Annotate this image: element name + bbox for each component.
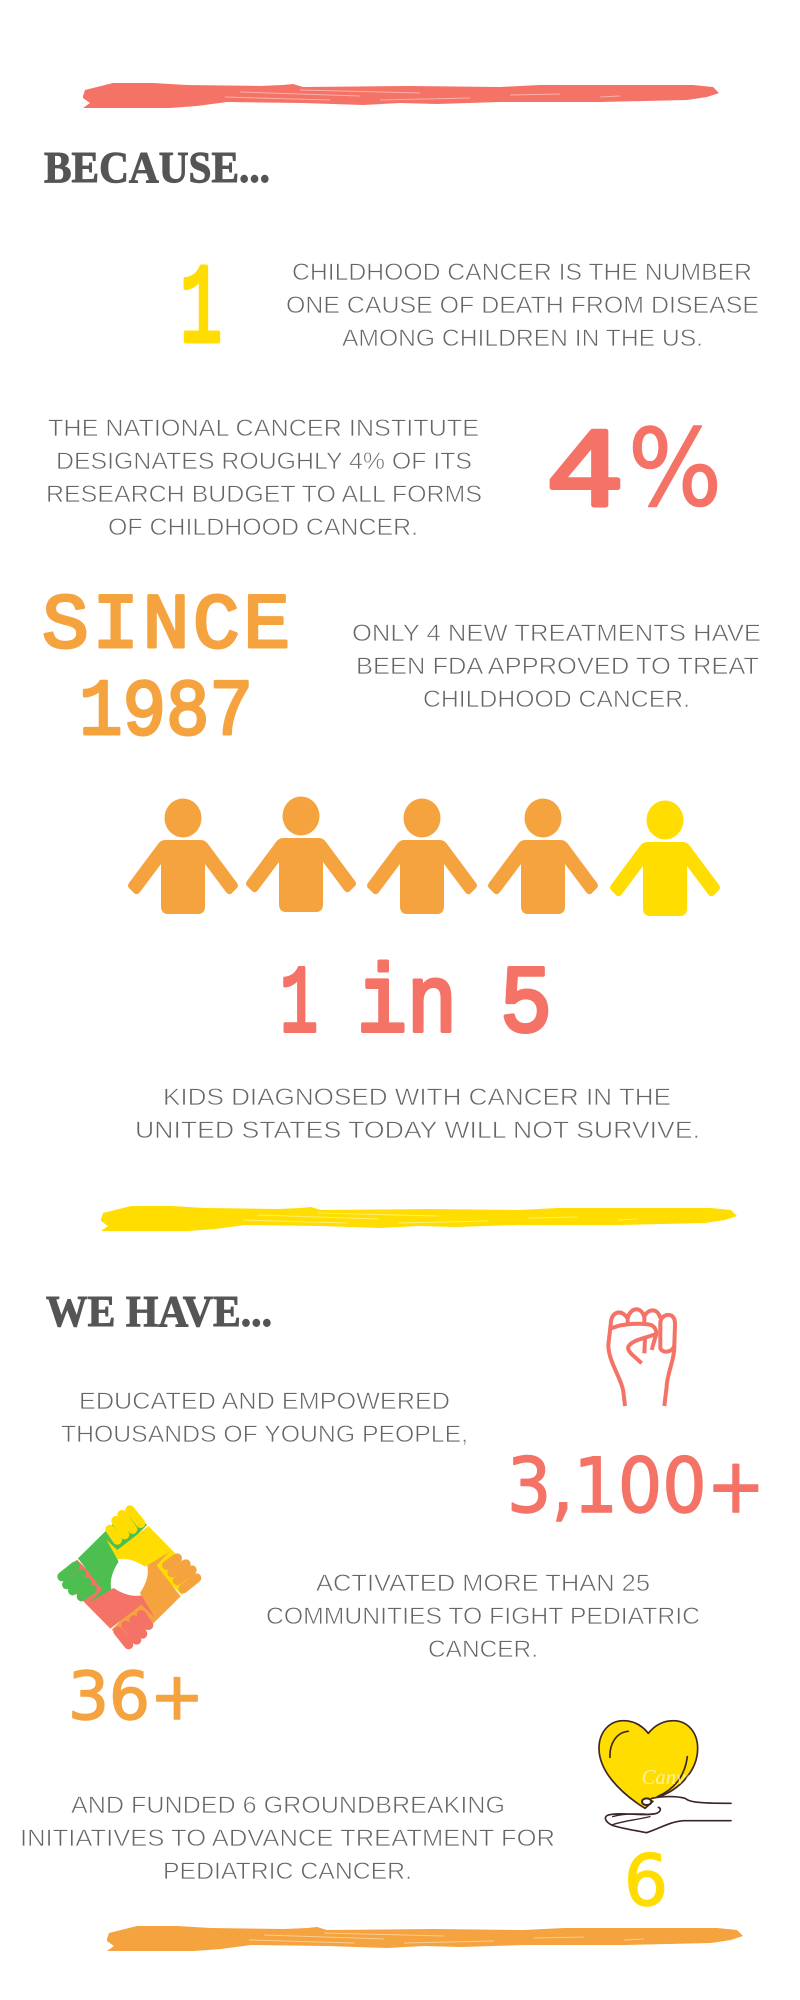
stat: four percent: %	[628, 407, 722, 530]
stat: since 1987	[42, 583, 290, 759]
text block: educated: EDUCATED AND EMPOWERED	[79, 1388, 450, 1415]
icon: four joined hands	[59, 1507, 200, 1648]
stat: 6: 6	[624, 1840, 668, 1922]
text block: will not survive: UNITED STATES TODAY WILL NOT SURVIVE.	[135, 1117, 700, 1144]
text block: will not survive	[135, 1084, 700, 1144]
stat: 1 in 5: 5	[500, 951, 552, 1060]
stat: since 1987: 1987	[79, 668, 253, 759]
icon: child 5 highlighted	[610, 800, 720, 916]
text block: leading cause: CHILDHOOD CANCER IS THE NUMBER	[292, 259, 752, 286]
text block: research budget: DESIGNATES ROUGHLY 4% OF ITS	[56, 448, 472, 475]
brush stroke: yellow	[101, 1206, 737, 1231]
text block: leading cause: AMONG CHILDREN IN THE US.	[342, 325, 703, 352]
text block: research budget: THE NATIONAL CANCER INSTITUTE	[48, 415, 479, 442]
text block: funded initiatives: AND FUNDED 6 GROUNDBREAKING	[71, 1792, 505, 1819]
text block: research budget: OF CHILDHOOD CANCER.	[108, 514, 418, 541]
text block: communities	[266, 1570, 700, 1663]
stat: 3,100+: 3,100+	[507, 1441, 765, 1530]
heading: because: BECAUSE...	[44, 143, 270, 192]
brush stroke: orange	[107, 1926, 743, 1951]
icon row: five children	[128, 796, 720, 916]
icon: heart in hand	[599, 1721, 731, 1833]
text block: research budget: RESEARCH BUDGET TO ALL FORMS	[46, 481, 482, 508]
text block: communities: ACTIVATED MORE THAN 25	[316, 1570, 650, 1597]
text block: new treatments	[352, 620, 761, 713]
text block: educated	[61, 1388, 468, 1448]
stat: 1 in 5	[280, 951, 552, 1060]
stat: 1 in 5: in	[357, 951, 457, 1060]
icon: child 3	[367, 798, 477, 914]
text block: leading cause: ONE CAUSE OF DEATH FROM DISEASE	[286, 292, 759, 319]
text block: communities: COMMUNITIES TO FIGHT PEDIATRIC	[266, 1603, 700, 1630]
text block: funded initiatives: INITIATIVES TO ADVANCE TREATMENT FOR	[20, 1825, 555, 1852]
stat: since 1987: SINCE	[42, 583, 290, 671]
text block: funded initiatives	[20, 1792, 555, 1885]
stat: four percent: 4	[546, 412, 624, 539]
stat: 36+: 36+	[68, 1658, 204, 1735]
icon: heart in hand: Canva	[642, 1767, 696, 1789]
text block: new treatments: ONLY 4 NEW TREATMENTS HAVE	[352, 620, 761, 647]
stat: four percent	[546, 407, 722, 539]
icon: child 2	[246, 796, 356, 912]
text block: new treatments: CHILDHOOD CANCER.	[423, 686, 690, 713]
stat: number one: 1	[180, 248, 222, 375]
icon: raised fist	[608, 1309, 675, 1406]
text block: funded initiatives: PEDIATRIC CANCER.	[163, 1858, 412, 1885]
heading: we have: WE HAVE...	[46, 1287, 272, 1336]
text block: communities: CANCER.	[428, 1636, 538, 1663]
text block: educated: THOUSANDS OF YOUNG PEOPLE,	[61, 1421, 468, 1448]
text block: leading cause	[286, 259, 759, 352]
icon: child 1	[128, 798, 238, 914]
brush stroke: coral	[83, 83, 719, 108]
icon: child 4	[488, 798, 598, 914]
text block: will not survive: KIDS DIAGNOSED WITH CANCER IN THE	[163, 1084, 671, 1111]
stat: 1 in 5: 1	[280, 951, 318, 1060]
text block: research budget	[46, 415, 482, 541]
text block: new treatments: BEEN FDA APPROVED TO TREAT	[356, 653, 759, 680]
